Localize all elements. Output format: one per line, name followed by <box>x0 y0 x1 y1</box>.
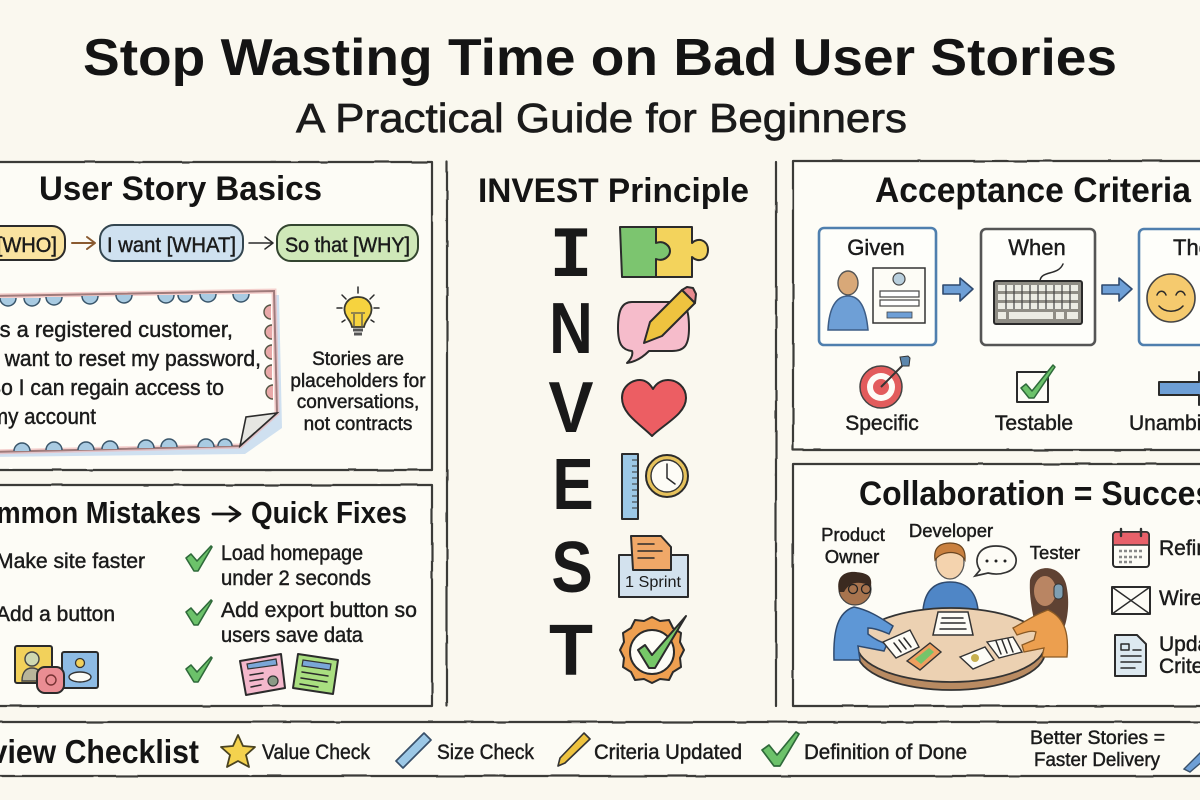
invest letters: E <box>552 445 594 525</box>
heading: mistakes to fixes: Quick Fixes <box>251 495 407 530</box>
story text <box>0 317 261 429</box>
icon: one sprint card (small) <box>619 536 688 597</box>
arrow: when to then <box>1102 278 1132 301</box>
icon: checkbox (testable) <box>1017 365 1055 402</box>
card: when: When <box>1008 235 1066 260</box>
label: specific: Specific <box>845 412 919 435</box>
role labels <box>821 520 1080 567</box>
icon: speech bubble with pencil (negotiable) <box>618 287 696 363</box>
heading: invest principle: INVEST Principle <box>478 172 749 210</box>
speech bubble <box>975 546 1016 576</box>
closing message: Faster Delivery <box>1034 750 1160 771</box>
label: criteria updated: Criteria Updated <box>594 741 742 764</box>
icon: arrow (unambiguous) <box>1159 372 1200 405</box>
invest letters: I <box>549 216 593 298</box>
heading: acceptance criteria: Acceptance Criteria <box>875 171 1192 210</box>
role labels: Product <box>821 524 885 545</box>
panel: collaboration <box>793 464 1200 706</box>
tip text: Stories are <box>312 349 404 370</box>
tip text <box>290 349 426 435</box>
icon: updated document <box>1115 635 1146 676</box>
icon: puzzle (independent) <box>620 227 708 277</box>
check marks <box>186 546 212 682</box>
label: definition of done: Definition of Done <box>804 741 967 764</box>
heading: user story basics: User Story Basics <box>39 170 322 208</box>
icon: check <box>762 732 799 766</box>
panel: acceptance criteria <box>793 161 1200 450</box>
role labels: Tester <box>1030 542 1080 563</box>
arrow: given to when <box>943 278 973 301</box>
role labels: Developer <box>909 520 993 541</box>
good stories list: Add export button so <box>221 599 417 622</box>
developer <box>923 543 978 610</box>
panel: user story basics <box>0 162 432 470</box>
heading: mistakes to fixes <box>0 495 407 530</box>
product owner <box>834 572 893 660</box>
left documents <box>883 630 941 670</box>
invest letters: N <box>549 289 593 369</box>
panel: review checklist <box>0 722 1200 776</box>
title: Stop Wasting Time on Bad User Stories <box>83 29 1117 87</box>
icon: ruler <box>396 733 431 768</box>
role labels: Owner <box>825 546 879 567</box>
label: size check: Size Check <box>437 741 534 764</box>
icon: one sprint card (small): 1 Sprint <box>625 574 682 591</box>
invest letters: T <box>549 611 593 691</box>
panel: common mistakes and quick fixes <box>0 485 432 706</box>
right documents <box>960 637 1022 669</box>
center document <box>933 612 973 635</box>
story text: I want to reset my password, <box>0 346 261 371</box>
sticky note story card <box>0 291 282 457</box>
subtitle: A Practical Guide for Beginners <box>296 95 907 141</box>
icon: approval badge (testable) <box>620 616 686 683</box>
icon: light bulb <box>337 287 379 334</box>
good stories list: users save data <box>221 624 363 647</box>
invest letters: V <box>548 367 594 447</box>
bad stories list <box>0 550 145 626</box>
icon: wireframe <box>1112 587 1150 614</box>
formula pills: So that [WHY] <box>285 234 410 257</box>
closing message: Better Stories = <box>1030 728 1165 749</box>
label: value check: Value Check <box>262 741 370 764</box>
icon: pencil <box>558 733 590 766</box>
icon: heart (valuable) <box>622 380 686 436</box>
label: testable: Testable <box>995 412 1073 435</box>
table <box>857 614 1045 690</box>
icon: star <box>221 735 255 767</box>
icon: calendar <box>1113 529 1149 567</box>
bad stories list: Make site faster <box>0 550 145 573</box>
icon: rising arrow <box>1184 749 1200 772</box>
icon: story cards <box>240 654 338 695</box>
icon: ruler and clock (estimable) <box>622 454 688 519</box>
card: then <box>1139 229 1200 345</box>
illustration: team around table <box>834 543 1068 690</box>
formula pills: I want [WHAT] <box>107 234 236 257</box>
icon: target (specific) <box>860 356 910 408</box>
tip text: placeholders for <box>290 371 426 392</box>
tip text: conversations, <box>297 392 419 413</box>
card: given <box>819 228 936 345</box>
formula pills <box>0 225 418 261</box>
icon: persona cards <box>15 646 98 693</box>
tester <box>1013 568 1068 657</box>
tip text: not contracts <box>304 414 412 435</box>
label: updated criteria <box>1159 633 1200 678</box>
closing message <box>1030 728 1165 771</box>
card: given: Given <box>847 235 905 260</box>
good stories list <box>221 542 417 647</box>
invest letters: S <box>551 528 593 608</box>
good stories list: Load homepage <box>221 542 363 565</box>
invest letters <box>548 216 594 691</box>
good stories list: under 2 seconds <box>221 567 371 590</box>
card: when <box>981 229 1095 345</box>
panel: invest principle <box>447 162 776 706</box>
